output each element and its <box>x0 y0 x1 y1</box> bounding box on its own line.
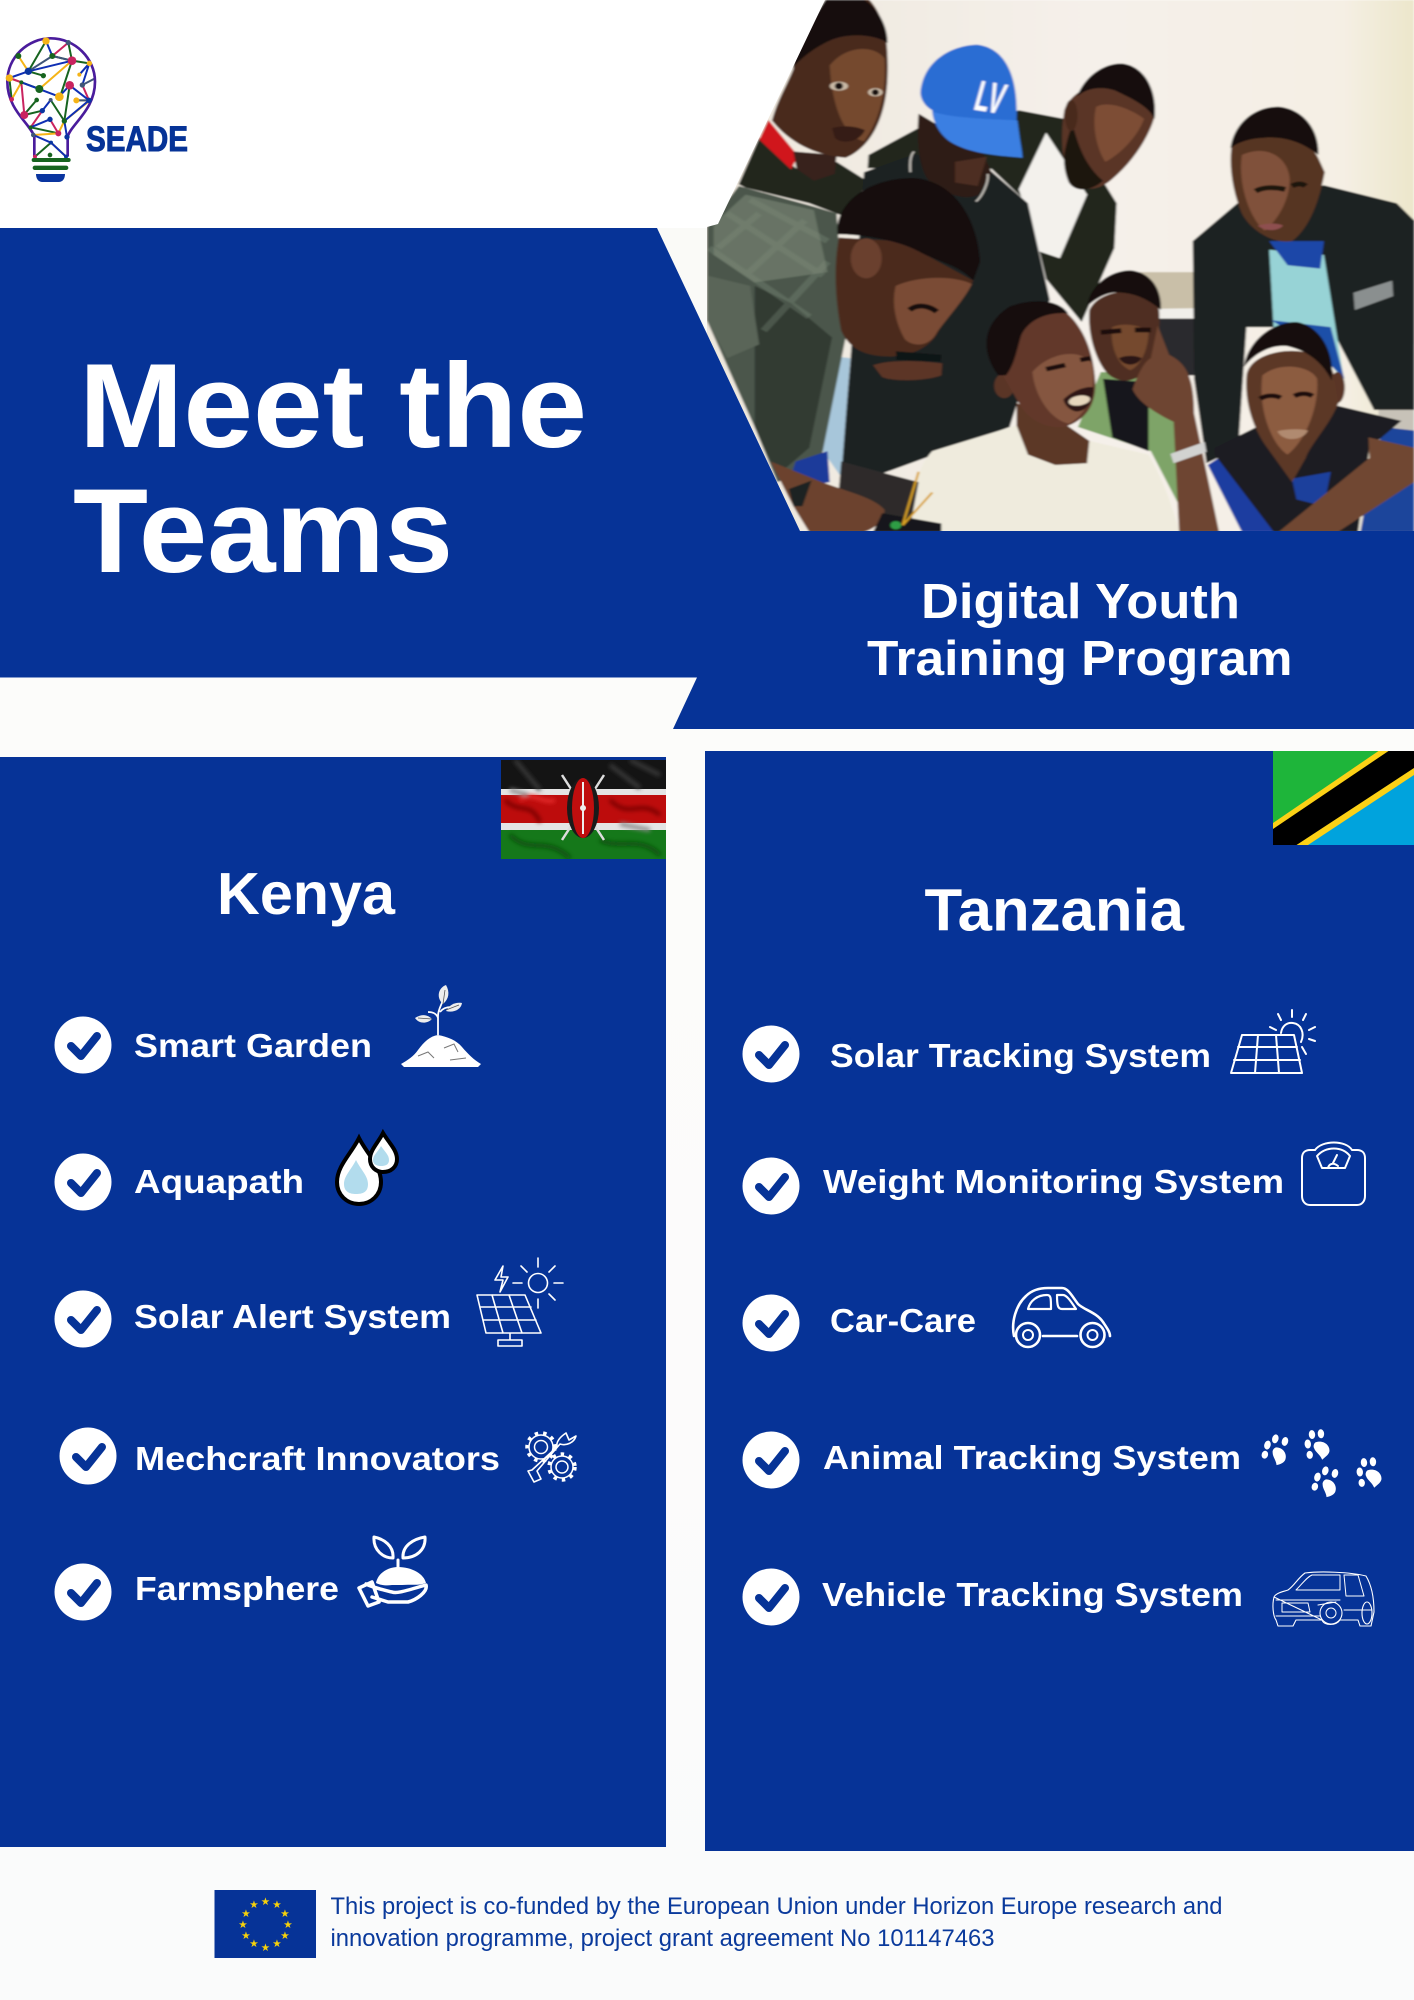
item: Farmsphere: Farmsphere <box>135 1570 339 1607</box>
person 7 behind center <box>1078 372 1183 508</box>
icon: EU flag: ★ <box>241 1930 251 1942</box>
icon: car <box>1013 1288 1110 1347</box>
icon: EU flag: ★ <box>249 1938 259 1950</box>
item: Mechcraft Innovators <box>60 1428 500 1484</box>
forearm bottom left <box>838 461 920 520</box>
icon: paw prints <box>1260 1429 1382 1499</box>
person 5 front-left <box>818 355 850 477</box>
icon: weighing scale <box>1302 1142 1365 1205</box>
item: Vehicle Tracking System <box>742 1568 1243 1626</box>
icon: EU flag: ★ <box>238 1919 248 1931</box>
item: Car-Care: Car-Care <box>830 1302 976 1339</box>
icon: EU flag: ★ <box>249 1899 259 1911</box>
icon: EU flag <box>214 1890 316 1958</box>
title <box>73 339 587 598</box>
icon: solar panel with sun and bolt <box>477 1258 563 1346</box>
funding statement: innovation programme, project grant agreement No 101147463 <box>330 1925 994 1952</box>
icon: seedling on soil mound <box>401 985 481 1067</box>
icon: EU flag: ★ <box>283 1919 293 1931</box>
team photo <box>700 0 1414 540</box>
icon: SUV outline <box>1273 1572 1374 1626</box>
icon: EU flag: ★ <box>261 1896 271 1908</box>
person 4 right <box>1193 185 1414 463</box>
funding footer <box>214 1890 1222 1958</box>
item: Animal Tracking System: Animal Tracking System <box>823 1439 1241 1476</box>
item: Weight Monitoring System <box>742 1158 1284 1214</box>
subtitle: program name: Training Program <box>867 632 1292 686</box>
item: Solar Tracking System: Solar Tracking System <box>830 1037 1211 1074</box>
icon: solar panel with sun <box>1231 1010 1315 1073</box>
item: Solar Tracking System <box>742 1026 1211 1082</box>
flag: Tanzania <box>1273 751 1414 845</box>
subtitle: program name: Digital Youth <box>921 575 1240 629</box>
flag: Kenya <box>501 760 666 859</box>
panel: Tanzania <box>705 751 1414 1851</box>
title: Teams <box>73 464 453 598</box>
person 6 seated <box>905 425 1179 532</box>
icon: EU flag: ★ <box>272 1938 282 1950</box>
item: Solar Alert System <box>54 1290 451 1348</box>
icon: EU flag: ★ <box>280 1930 290 1942</box>
icon: EU flag: ★ <box>272 1899 282 1911</box>
item: Smart Garden: Smart Garden <box>134 1027 372 1064</box>
icon: hand holding sprout <box>359 1537 426 1606</box>
item: Aquapath: Aquapath <box>134 1163 304 1200</box>
item: Solar Alert System: Solar Alert System <box>134 1298 451 1335</box>
item: Vehicle Tracking System: Vehicle Tracking System <box>822 1576 1243 1613</box>
funding statement: This project is co-funded by the European Union under Horizon Europe research and <box>330 1893 1222 1920</box>
item: Car-Care <box>742 1294 976 1352</box>
hero banner <box>0 228 1414 729</box>
icon: gears and wrench <box>527 1433 576 1482</box>
person 2 <box>841 154 1050 474</box>
icon: EU flag: ★ <box>241 1908 251 1920</box>
logo: SEADE lightbulb: SEADE <box>86 120 188 159</box>
item: Animal Tracking System <box>742 1432 1241 1488</box>
icon: EU flag: ★ <box>280 1908 290 1920</box>
item: Mechcraft Innovators: Mechcraft Innovators <box>135 1440 500 1477</box>
icon: water drops <box>337 1133 397 1204</box>
person 1 <box>739 138 869 215</box>
panel: Kenya <box>0 757 666 1847</box>
heading: Tanzania: Tanzania <box>924 878 1185 944</box>
item: Smart Garden <box>54 1016 372 1074</box>
cap logo: LV <box>970 72 1011 124</box>
subtitle: program name <box>867 575 1292 686</box>
item: Aquapath <box>54 1154 304 1210</box>
funding statement <box>330 1893 1222 1952</box>
person 8 front right <box>1208 455 1276 532</box>
logo: SEADE lightbulb <box>6 37 188 182</box>
item: Farmsphere <box>54 1564 339 1620</box>
title: Meet the <box>79 339 587 473</box>
icon: EU flag: ★ <box>261 1942 271 1954</box>
heading: Kenya: Kenya <box>217 861 396 927</box>
back row: person 3 <box>868 110 1117 322</box>
item: Weight Monitoring System: Weight Monitoring System <box>823 1163 1284 1200</box>
